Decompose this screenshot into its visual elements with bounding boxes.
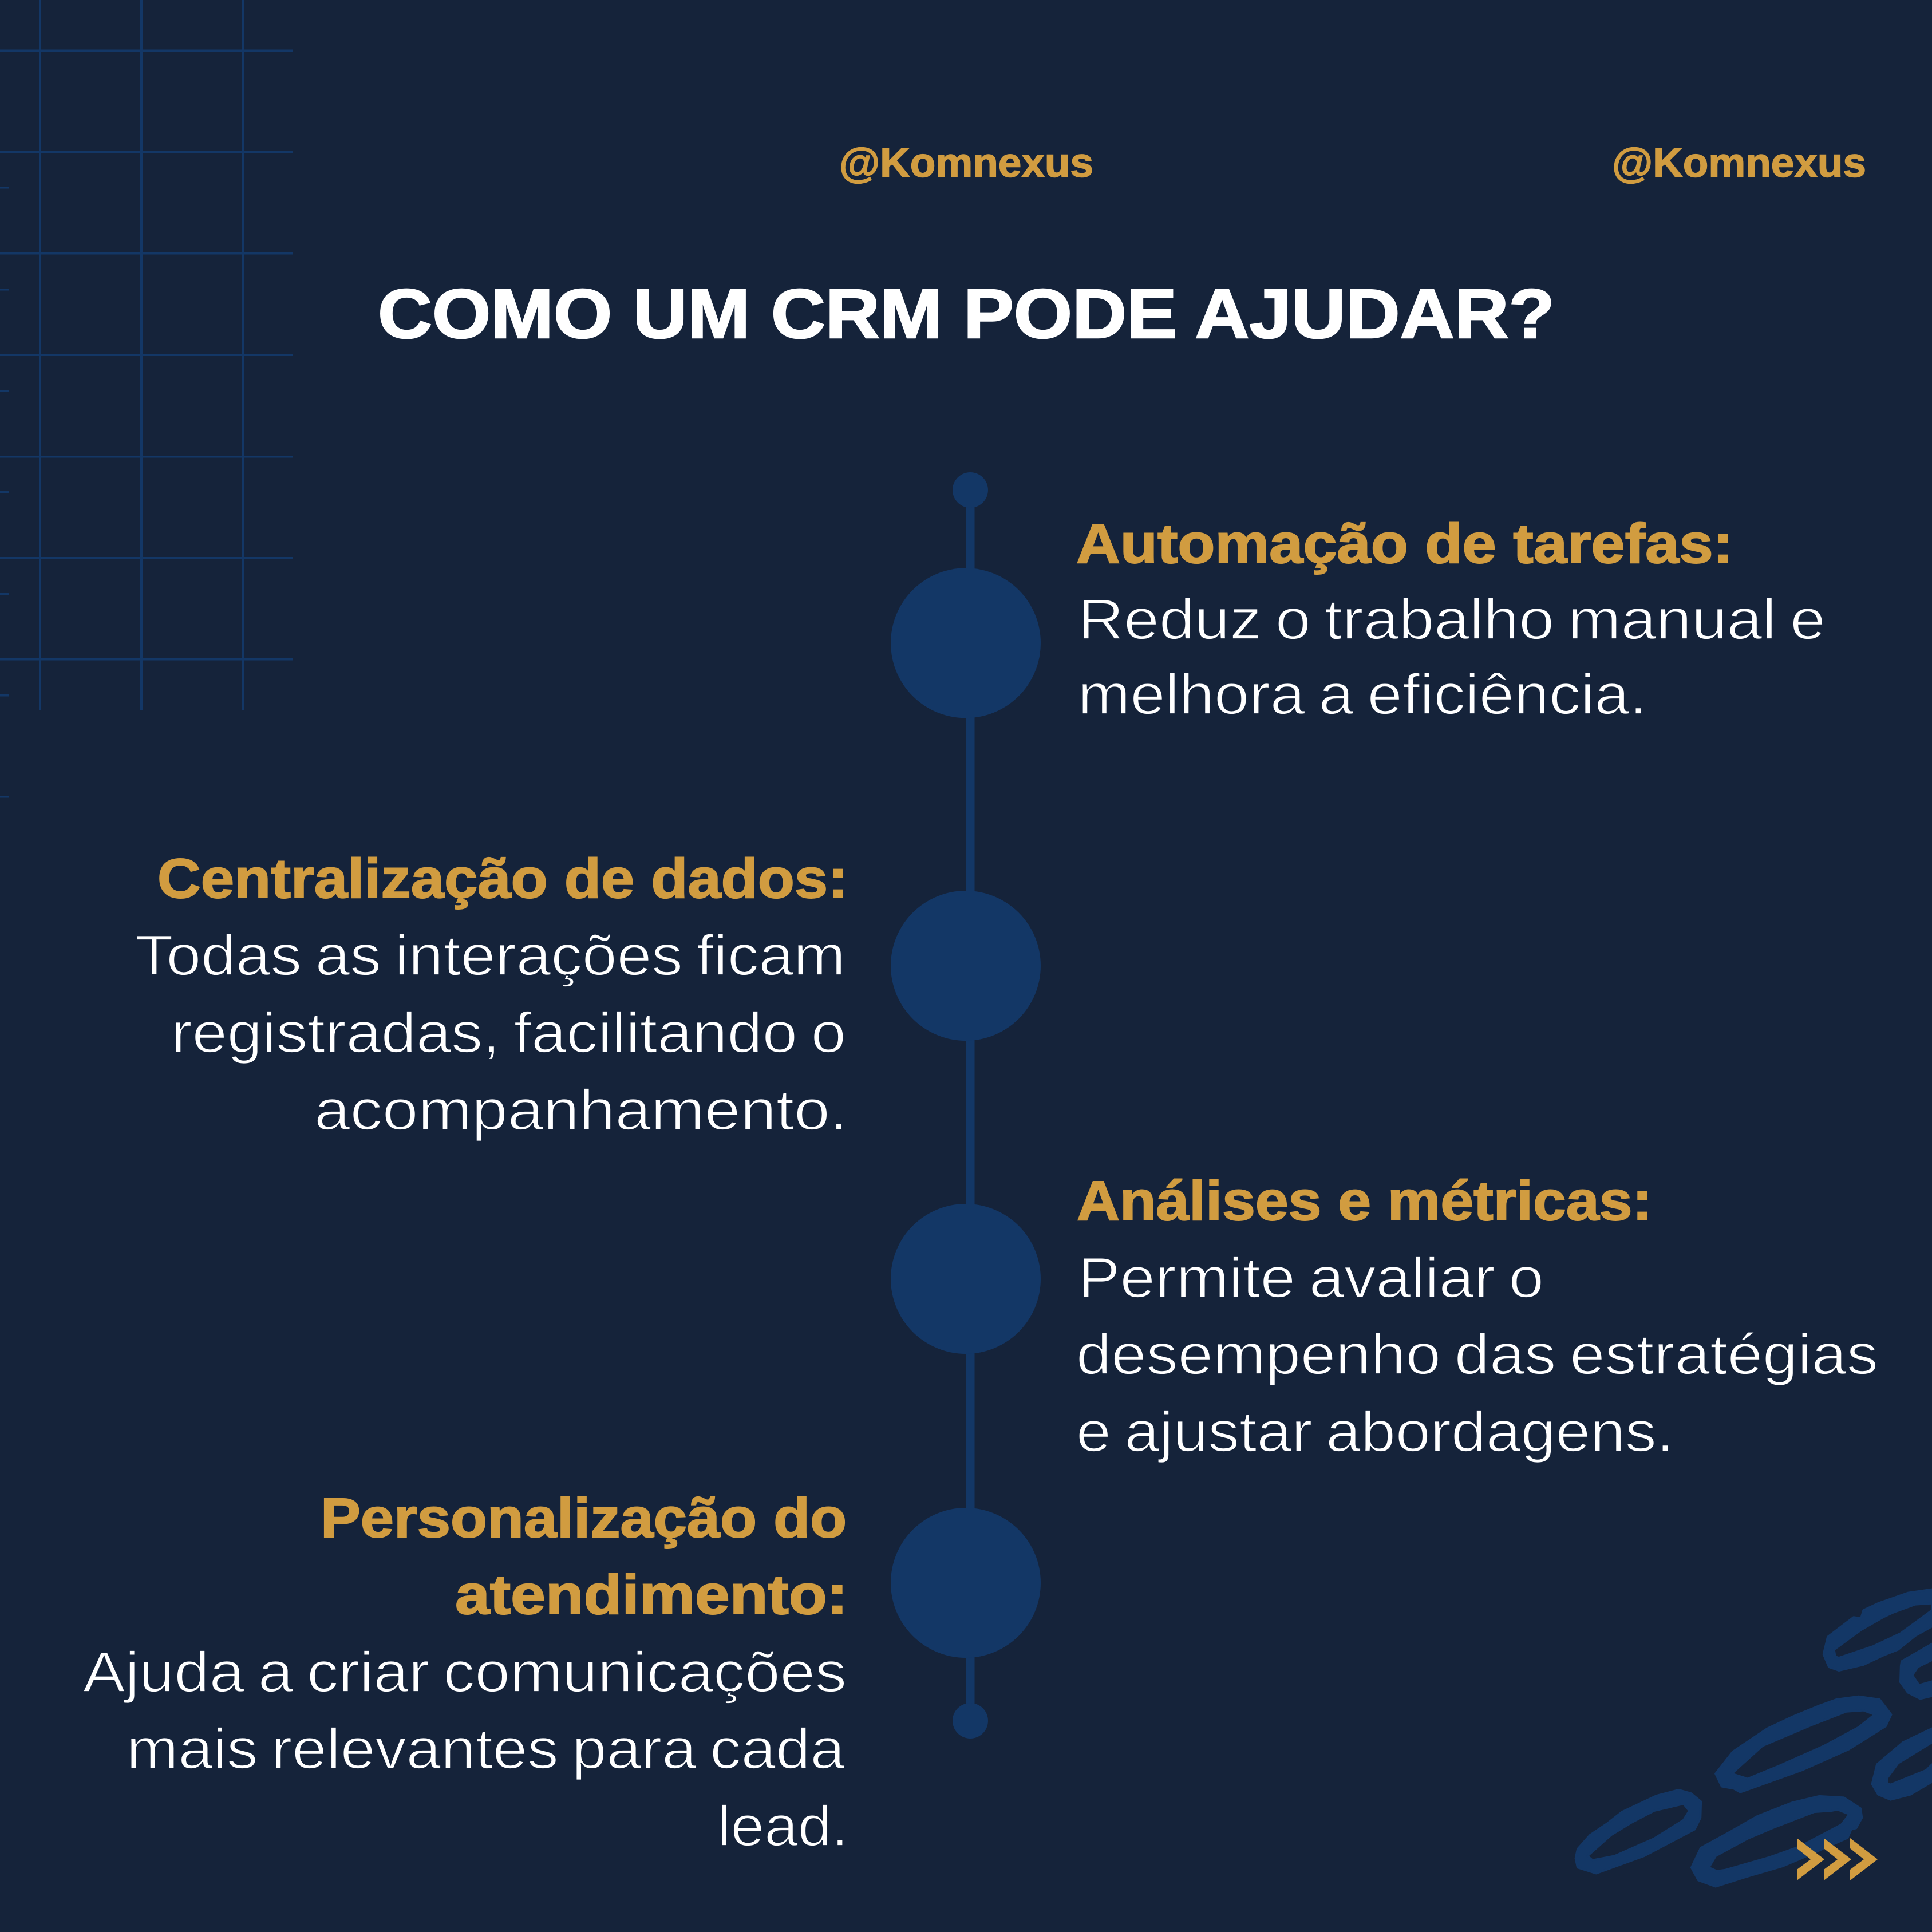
heading: atendimento: <box>455 1563 848 1626</box>
body: mais relevantes para cada <box>127 1717 846 1780</box>
block: Centralização de dados <box>135 847 848 1141</box>
handle: top right: @Komnexus <box>1612 140 1866 186</box>
body: desempenho das estratégias <box>1076 1322 1878 1386</box>
heading: Personalização do <box>321 1487 847 1549</box>
body: Permite avaliar o <box>1078 1246 1544 1309</box>
body: Todas as interações ficam <box>135 923 846 987</box>
body: acompanhamento. <box>314 1078 848 1141</box>
handle: center: @Komnexus <box>839 140 1093 186</box>
heading: Centralização de dados: <box>157 847 848 910</box>
body <box>135 923 848 1141</box>
timeline <box>891 472 1041 1739</box>
body <box>83 1640 848 1858</box>
heading: Automação de tarefas: <box>1076 512 1733 575</box>
body: melhora a eficiência. <box>1078 662 1647 726</box>
heading <box>321 1487 848 1626</box>
body <box>1078 587 1826 726</box>
body: Reduz o trabalho manual e <box>1078 587 1826 651</box>
body: e ajustar abordagens. <box>1076 1400 1674 1463</box>
body: registradas, facilitando o <box>171 1001 846 1064</box>
heading: Análises e métricas: <box>1077 1170 1652 1232</box>
body: Ajuda a criar comunicações <box>83 1640 847 1704</box>
icon: next arrows <box>1797 1838 1878 1880</box>
decorative brush ovals <box>1576 1589 1932 1887</box>
body <box>1076 1246 1878 1463</box>
block: Personalização do atendimento <box>83 1487 848 1858</box>
title: COMO UM CRM PODE AJUDAR? <box>378 275 1555 353</box>
block: Automação de tarefas <box>1076 512 1826 726</box>
block: Análises e métricas <box>1076 1170 1878 1463</box>
body: lead. <box>717 1794 848 1858</box>
